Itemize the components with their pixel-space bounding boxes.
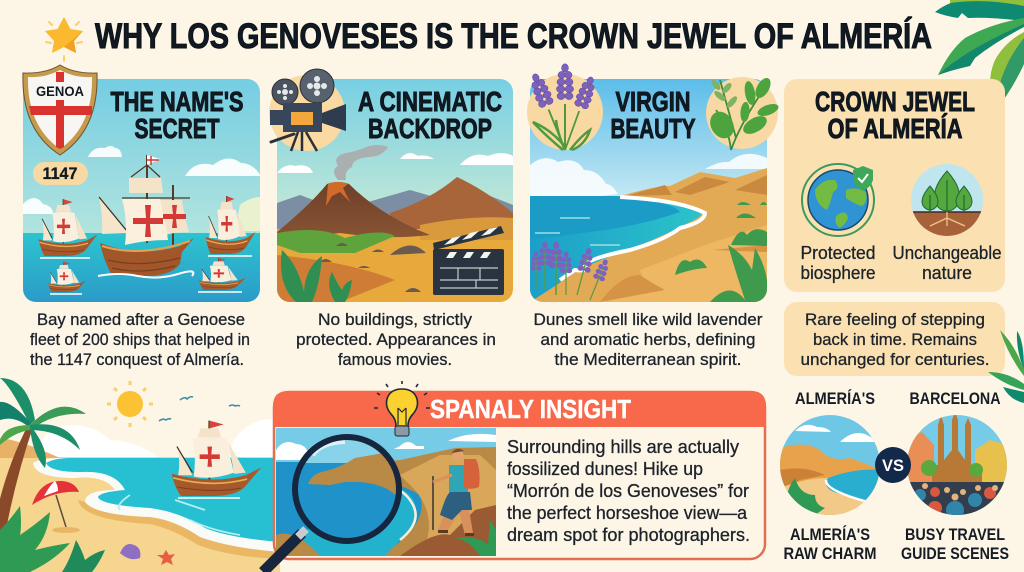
heading: crown jewel: OF ALMERÍA bbox=[828, 113, 962, 144]
panel scene: volcanic landscape bbox=[277, 79, 513, 302]
text block: insight body: dream spot for photographers. bbox=[507, 525, 750, 545]
title bbox=[45, 16, 932, 61]
sea water bbox=[46, 458, 280, 542]
text block: insight body: “Morrón de los Genoveses” for bbox=[507, 481, 749, 501]
text block: virgin beauty caption bbox=[534, 310, 763, 369]
icon: magnifying glass bbox=[263, 437, 400, 572]
ship bbox=[172, 421, 261, 498]
main ship bbox=[98, 155, 194, 278]
heading: Spanaly insight: SPANALY INSIGHT bbox=[430, 394, 631, 424]
text block: cinematic caption: famous movies. bbox=[338, 350, 452, 369]
heading: the name's secret: THE NAME'S bbox=[110, 86, 244, 117]
birds bbox=[159, 397, 240, 421]
text block: insight body: fossilized dunes! Hike up bbox=[507, 459, 703, 479]
plants bbox=[0, 506, 105, 572]
sea foam bbox=[33, 458, 280, 552]
heading: crown jewel bbox=[815, 86, 975, 144]
sand bbox=[0, 457, 280, 572]
label: Almería's top: ALMERÍA'S bbox=[795, 389, 875, 408]
heading: virgin beauty: BEAUTY bbox=[610, 113, 696, 144]
icon: starfish bbox=[157, 550, 175, 565]
illustration: hiker and bay bbox=[276, 428, 496, 556]
text block: insight body: Surrounding hills are actually bbox=[507, 437, 739, 457]
icon: Genoa shield bbox=[23, 65, 97, 155]
label: protected biosphere: biosphere bbox=[800, 263, 876, 283]
panel: rare feeling: back in time. Remains bbox=[813, 330, 977, 349]
image circle: Almería coast bbox=[780, 415, 880, 515]
illustration: beach scene bbox=[0, 378, 280, 572]
text block: insight body: the perfect horseshoe view—a bbox=[507, 503, 748, 523]
text block: virgin beauty caption: Dunes smell like wild lavender bbox=[534, 310, 763, 329]
text block: virgin beauty caption: the Mediterranean spirit. bbox=[554, 350, 742, 369]
icon: lavender bbox=[527, 64, 603, 153]
text block: cinematic caption bbox=[296, 310, 496, 369]
icon: top-right palm fronds bbox=[935, 0, 1024, 111]
text block: insight body bbox=[507, 437, 750, 545]
panel: Spanaly insight bbox=[263, 381, 766, 572]
panel: virgin beauty bbox=[527, 64, 780, 302]
text block: virgin beauty caption: and aromatic herbs, defining bbox=[540, 330, 756, 349]
icon: aromatic herb bbox=[705, 75, 780, 150]
icon: clapperboard bbox=[433, 226, 504, 295]
icon: right palm leaves bbox=[988, 330, 1024, 403]
text block: name's secret caption: Bay named after a Genoese bbox=[37, 310, 245, 329]
icon: lightbulb bbox=[374, 381, 430, 436]
text block: cinematic caption: protected. Appearances in bbox=[296, 330, 496, 349]
heading: the name's secret bbox=[110, 86, 244, 144]
heading: a cinematic backdrop: BACKDROP bbox=[368, 113, 492, 144]
panel scene: beach and dunes bbox=[530, 79, 767, 302]
heading: a cinematic backdrop bbox=[358, 86, 502, 144]
panel: rare feeling: unchanged for centuries. bbox=[800, 350, 990, 369]
icon: beach umbrella bbox=[32, 481, 80, 533]
label: protected biosphere bbox=[800, 243, 876, 283]
palm tree bbox=[0, 378, 86, 540]
label: protected biosphere: Protected bbox=[800, 243, 876, 263]
heading: a cinematic backdrop: A CINEMATIC bbox=[358, 86, 502, 117]
panel: crown jewel of Almería bbox=[784, 79, 1005, 292]
heading: crown jewel: CROWN JEWEL bbox=[815, 86, 975, 117]
label: Almería's raw charm: ALMERÍA'S bbox=[790, 525, 870, 544]
label: busy travel guide scenes: BUSY TRAVEL bbox=[905, 525, 1005, 544]
heading: virgin beauty: VIRGIN bbox=[616, 86, 690, 117]
label: Barcelona top: BARCELONA bbox=[910, 389, 1000, 408]
panel: rare feeling: Rare feeling of stepping bbox=[805, 310, 985, 329]
icon: star bbox=[45, 17, 83, 61]
badge: 1147 bbox=[33, 162, 88, 185]
icon: shell bbox=[120, 544, 140, 559]
text block: name's secret caption: fleet of 200 ships that helped in bbox=[30, 330, 250, 349]
label: Almería's raw charm bbox=[784, 525, 876, 563]
text block: name's secret caption: the 1147 conquest of Almería. bbox=[30, 350, 244, 369]
clouds bbox=[39, 418, 280, 458]
label: unchangeable nature: Unchangeable bbox=[892, 243, 1002, 263]
panel: rare feeling bbox=[784, 302, 1005, 376]
comparison: Almería vs Barcelona bbox=[780, 389, 1009, 563]
small ships bbox=[39, 196, 255, 294]
header bar bbox=[273, 391, 766, 427]
text block: cinematic caption: No buildings, strictly bbox=[318, 310, 473, 329]
panel: the name's secret bbox=[23, 65, 261, 302]
label: unchangeable nature: nature bbox=[922, 263, 972, 283]
badge: VS: VS bbox=[882, 456, 904, 475]
icon: film camera bbox=[269, 69, 346, 151]
label: busy travel guide scenes bbox=[901, 525, 1009, 563]
heading: virgin beauty bbox=[610, 86, 696, 144]
badge: 1147: 1147 bbox=[42, 164, 78, 183]
hiker bbox=[433, 449, 480, 536]
badge: VS bbox=[875, 447, 911, 483]
icon: protected globe bbox=[802, 164, 874, 236]
heading: the name's secret: SECRET bbox=[134, 113, 220, 144]
image circle: Barcelona crowd bbox=[907, 412, 1007, 519]
wet sand bbox=[78, 500, 280, 559]
panel: a cinematic backdrop bbox=[269, 69, 513, 302]
far hill bbox=[0, 438, 60, 458]
panel scene: sea and fleet bbox=[23, 79, 261, 302]
icon: sun bbox=[107, 381, 153, 427]
icon: unchangeable nature bbox=[911, 164, 983, 238]
label: Almería's raw charm: RAW CHARM bbox=[784, 544, 876, 563]
text block: name's secret caption bbox=[30, 310, 250, 369]
label: unchangeable nature bbox=[892, 243, 1002, 283]
shield label: GENOA bbox=[36, 83, 84, 99]
